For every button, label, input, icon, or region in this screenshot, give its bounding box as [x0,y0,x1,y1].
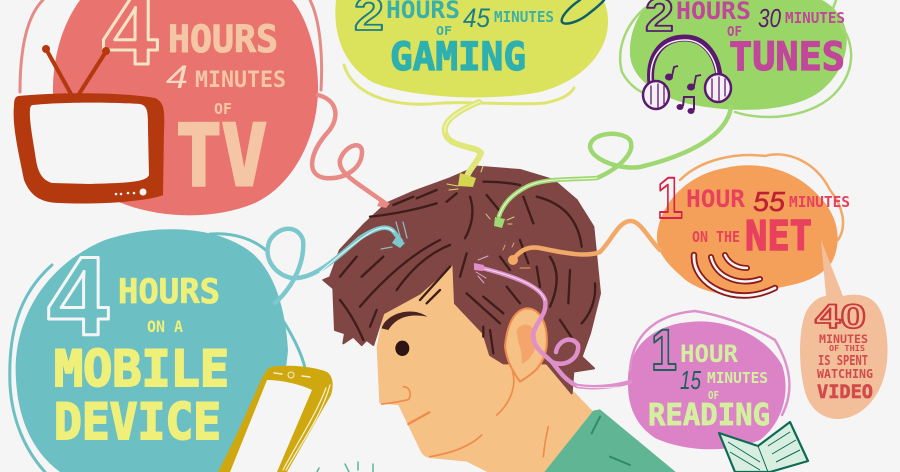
label: on the: ON THE [692,228,740,246]
label: of this: OF THIS [829,344,866,353]
decorative sparks [317,462,373,472]
heading: hour: HOUR [680,340,739,368]
label: minutes: MINUTES [819,332,868,346]
bubble shape: net [657,165,838,295]
heading: gaming: GAMING [390,35,526,80]
bubble outline: net [680,154,843,240]
heading: tunes: TUNES [729,35,845,80]
cable: reading [474,256,630,388]
heading: hour: HOUR [686,185,746,213]
jaw line [430,372,548,457]
bubble shape: mobile [16,229,288,472]
digit: 1: 1 [651,318,677,383]
icon: smartphone [218,366,333,472]
cable: mobile [268,222,407,303]
label: minutes: MINUTES [707,369,768,387]
hair [323,167,600,393]
icon: headphones [643,38,731,109]
icon: wifi waves [694,255,775,296]
panel: gaming bubble [335,0,608,104]
digit: 55: 55 [753,186,785,217]
bubble outline: tunes [620,0,851,117]
digit: 15: 15 [680,365,701,395]
heading: hours: HOURS [118,272,220,312]
label: minutes: MINUTES [494,8,554,26]
heading: hours: HOURS [168,18,278,61]
panel: net bubble [657,154,850,296]
ear [505,308,547,382]
digit: 30: 30 [758,3,781,33]
label: of: OF [214,100,232,118]
panel: tunes bubble [620,0,851,117]
label: of: OF [436,23,452,38]
shirt [543,409,677,472]
nose [382,387,410,404]
bubble outline: reading [630,311,789,415]
digit: 4: 4 [47,234,109,359]
bubble shape: reading [628,321,786,449]
heading: TV: TV [176,107,267,206]
label: of: OF [708,389,719,402]
label: is spent: IS SPENT [818,353,868,369]
bubble shape: tunes [630,0,847,110]
bubble shape: gaming [335,0,608,97]
digits: 40: 40 [815,298,866,336]
eye [395,341,409,356]
cable: TV [312,95,385,203]
bubble outline: mobile [10,234,305,472]
panel: reading bubble [628,311,808,472]
icon: open book [719,422,808,472]
bubble outline: gaming [344,65,574,104]
cable: tunes [486,107,731,228]
label: minutes: MINUTES [195,68,286,93]
icon: controller fragment [562,0,604,24]
callout shape [800,240,888,419]
digit: 4 minutes: 4 [166,59,188,95]
cable: net [503,221,660,268]
neck and face [377,263,593,472]
illustration: person [323,167,677,472]
digit: 1: 1 [657,166,683,231]
panel: TV bubble [14,0,385,215]
label: of: OF [727,25,742,40]
hair strands [340,182,595,353]
heading: video: VIDEO [817,381,873,403]
cable: gaming [445,102,483,190]
panel: video callout [800,240,888,419]
bubble shape: TV [53,0,318,215]
ear inner [517,325,537,364]
label: minutes: MINUTES [785,9,845,27]
heading: device: DEVICE [54,393,221,451]
panel: mobile device bubble [10,229,333,472]
mouth [408,412,429,424]
heading: mobile: MOBILE [54,340,229,398]
digit: 45: 45 [463,3,491,33]
icon: music notes [665,66,701,114]
bubble outline: TV [20,0,322,92]
label: minutes: MINUTES [789,193,850,211]
eyebrow [382,312,427,330]
heading: reading: READING [648,398,770,433]
label: watching: WATCHING [817,366,873,381]
heading: net: NET [745,212,812,260]
shirt creases [592,417,630,465]
cable: TV plug [377,200,390,208]
label: on a: ON A [147,317,183,336]
icon: television [14,45,164,204]
